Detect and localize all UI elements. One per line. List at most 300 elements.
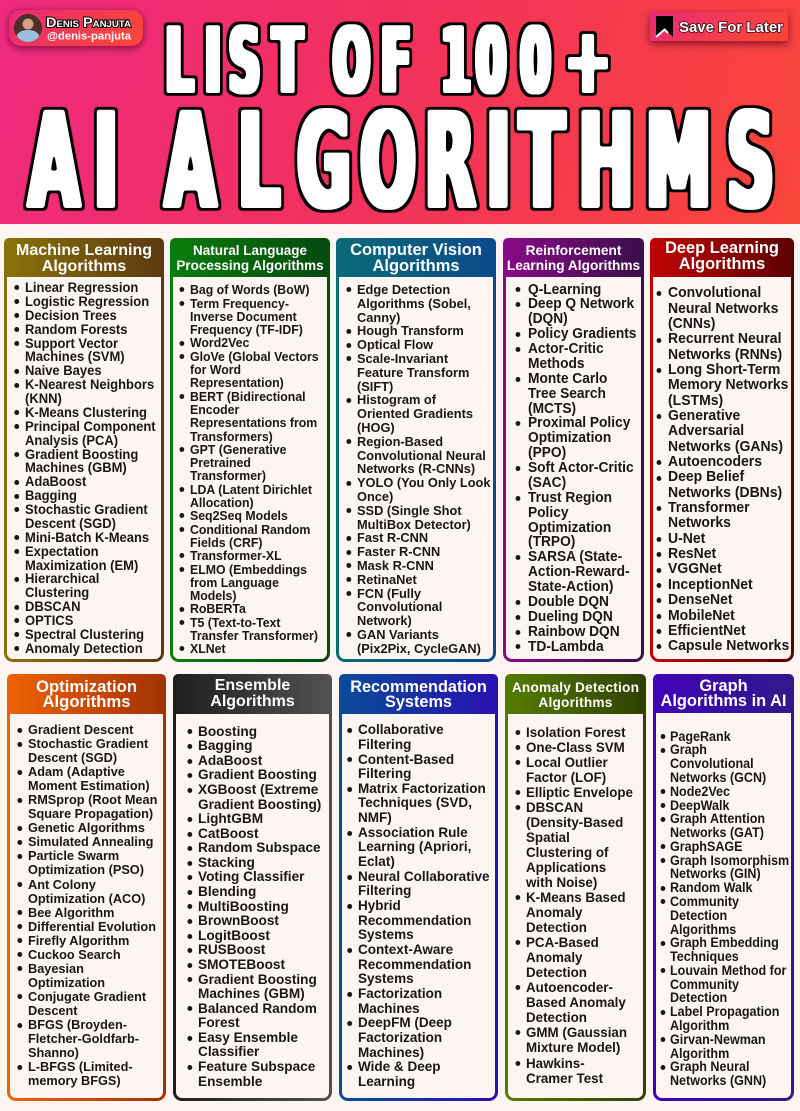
list: ensemble: Bagging: [198, 738, 252, 754]
list: reinforcement learning: Policy: [528, 505, 568, 521]
panel: optimization: [7, 674, 166, 1101]
list: machine learning: Mini-Batch K-Means: [25, 530, 149, 545]
list: machine learning: OPTICS: [25, 613, 73, 628]
list: reinforcement learning: Actor-Critic: [528, 341, 604, 357]
list: anomaly detection: One-Class SVM: [526, 739, 625, 755]
author name: Denis Panjuta: [46, 15, 132, 30]
heading: reinforcement learning: Learning Algorithms: [507, 258, 640, 273]
title line: list of 100+: LIST OF 100: [166, 8, 551, 114]
list: deep learning: Networks (DBNs): [668, 485, 782, 501]
list: machine learning: Gradient Boosting: [25, 446, 138, 462]
list: computer vision: Network): [357, 613, 412, 628]
header banner: [0, 0, 800, 224]
list: optimization: Bee Algorithm: [28, 905, 115, 920]
list: recommendation systems: Filtering: [358, 883, 411, 898]
list: natural language processing: Transformers): [190, 429, 273, 444]
list: deep learning: Long Short-Term: [668, 362, 780, 378]
list: optimization: Adam (Adaptive: [28, 764, 125, 779]
list: reinforcement learning: Trust Region: [528, 490, 612, 506]
title line: list of 100+: +: [565, 8, 611, 114]
list: deep learning: ResNet: [668, 546, 716, 562]
list: ensemble: SMOTEBoost: [198, 957, 285, 973]
list: deep learning: InceptionNet: [668, 577, 753, 593]
list: ensemble: [187, 724, 321, 1090]
list: deep learning: Networks (GANs): [668, 439, 783, 455]
list: anomaly detection: Factor (LOF): [526, 769, 606, 785]
list: computer vision: Convolutional Neural: [357, 448, 486, 463]
list: optimization: Particle Swarm: [28, 848, 119, 863]
list: deep learning: Capsule Networks: [668, 638, 789, 654]
list: recommendation systems: Recommendation: [358, 957, 471, 972]
list: machine learning: Hierarchical: [25, 571, 99, 586]
list: anomaly detection: Local Outlier: [526, 754, 608, 770]
list: ensemble: Balanced Random: [198, 1001, 317, 1017]
list: recommendation systems: DeepFM (Deep: [358, 1015, 452, 1030]
list: ensemble: Forest: [198, 1015, 240, 1031]
list: graph algorithms: Community: [670, 977, 739, 992]
list: recommendation systems: Matrix Factorization: [358, 781, 486, 796]
list: reinforcement learning: (PPO): [528, 445, 566, 461]
list: reinforcement learning: SARSA (State-: [528, 549, 622, 565]
list: optimization: RMSprop (Root Mean: [28, 792, 157, 807]
list: reinforcement learning: (MCTS): [528, 400, 576, 416]
heading: anomaly detection: [512, 680, 639, 710]
list: ensemble: Gradient Boosting: [198, 972, 317, 988]
list: natural language processing: XLNet: [190, 641, 226, 656]
list: reinforcement learning: Methods: [528, 356, 585, 372]
list: natural language processing: Seq2Seq Models: [190, 508, 288, 523]
list: natural language processing: Conditional Random: [190, 522, 310, 537]
heading: computer vision: Algorithms: [372, 257, 460, 275]
list: natural language processing: RoBERTa: [190, 601, 246, 616]
heading: computer vision: Computer Vision: [350, 241, 482, 259]
list: recommendation systems: Content-Based: [358, 752, 454, 766]
list: recommendation systems: Systems: [358, 927, 414, 942]
list: reinforcement learning: Rainbow DQN: [528, 624, 620, 640]
list: optimization: Descent: [28, 1003, 78, 1018]
list: reinforcement learning: (DQN): [528, 311, 568, 327]
list: deep learning: (LSTMs): [668, 393, 723, 409]
list: machine learning: Descent (SGD): [25, 516, 116, 531]
list: graph algorithms: Graph: [670, 742, 707, 757]
list: machine learning: K-Nearest Neighbors: [25, 377, 154, 392]
list: recommendation systems: Association Rule: [358, 825, 468, 840]
list: deep learning: Networks: [668, 515, 731, 531]
list: natural language processing: Transformer): [190, 468, 266, 483]
list: computer vision: Edge Detection: [357, 282, 450, 297]
list: optimization: Ant Colony: [28, 877, 96, 892]
list: reinforcement learning: Q-Learning: [528, 282, 601, 298]
list: reinforcement learning: Deep Q Network: [528, 296, 634, 312]
list: recommendation systems: Filtering: [358, 766, 411, 781]
heading: reinforcement learning: [507, 242, 640, 273]
list: recommendation systems: Hybrid: [358, 898, 401, 913]
list: graph algorithms: Networks (GIN): [670, 866, 761, 881]
list: ensemble: Gradient Boosting: [198, 767, 317, 783]
list: optimization: Gradient Descent: [28, 722, 133, 737]
list: optimization: Optimization: [28, 975, 105, 990]
heading: graph algorithms: Graph: [699, 677, 748, 695]
list: computer vision: FCN (Fully: [357, 586, 421, 601]
list: machine learning: Bagging: [25, 488, 77, 503]
list: computer vision: Oriented Gradients: [357, 406, 473, 421]
list: deep learning: Networks (RNNs): [668, 347, 782, 363]
heading: machine learning: Machine Learning: [16, 242, 152, 259]
heading: graph algorithms: Algorithms in AI: [661, 692, 786, 710]
list: natural language processing: Frequency (TF-IDF): [190, 322, 303, 337]
list: recommendation systems: Context-Aware: [358, 942, 453, 957]
list: graph algorithms: Graph Isomorphism: [670, 853, 789, 868]
list: natural language processing: Bag of Words (BoW): [190, 282, 309, 297]
heading: machine learning: Algorithms: [42, 258, 126, 275]
list: deep learning: Memory Networks: [668, 377, 788, 393]
list: recommendation systems: Learning: [358, 1074, 415, 1089]
list: computer vision: SSD (Single Shot: [357, 503, 462, 518]
list: graph algorithms: [660, 729, 789, 1088]
heading: reinforcement learning: Reinforcement: [526, 242, 621, 258]
panel: deep learning: [650, 238, 794, 662]
list: ensemble: BrownBoost: [198, 913, 279, 929]
list: natural language processing: GPT (Generative: [190, 442, 286, 457]
list: optimization: Moment Estimation): [28, 778, 150, 793]
list: ensemble: MultiBoosting: [198, 899, 289, 915]
list: computer vision: [346, 282, 491, 656]
list: anomaly detection: [516, 724, 633, 1086]
list: optimization: Optimization (PSO): [28, 862, 144, 877]
list: reinforcement learning: Soft Actor-Critic: [528, 460, 634, 476]
list: optimization: Cuckoo Search: [28, 947, 121, 962]
list: machine learning: (KNN): [25, 391, 62, 406]
list: ensemble: Blending: [198, 884, 256, 900]
heading: deep learning: Deep Learning: [665, 239, 779, 257]
list: recommendation systems: Machines): [358, 1045, 424, 1060]
list: deep learning: DenseNet: [668, 592, 733, 608]
icon: bookmark: [656, 16, 673, 37]
list: graph algorithms: Techniques: [670, 949, 739, 964]
list: optimization: Square Propagation): [28, 806, 153, 821]
heading: ensemble: Algorithms: [210, 693, 295, 710]
list: natural language processing: Representation): [190, 375, 284, 390]
list: reinforcement learning: Action-Reward-: [528, 564, 630, 580]
list: machine learning: Maximization (EM): [25, 558, 138, 572]
list: machine learning: Stochastic Gradient: [25, 502, 148, 517]
list: deep learning: Neural Networks: [668, 301, 778, 317]
list: natural language processing: LDA (Latent Dirichlet: [190, 482, 312, 497]
list: anomaly detection: Detection: [526, 1009, 587, 1025]
list: natural language processing: Allocation): [190, 495, 254, 510]
icon: profile avatar: [14, 14, 42, 42]
list: natural language processing: GloVe (Global Vectors: [190, 349, 319, 364]
heading: optimization: [36, 677, 137, 711]
list: optimization: Genetic Algorithms: [28, 820, 145, 835]
list: ensemble: Gradient Boosting): [198, 797, 321, 813]
list: computer vision: Region-Based: [357, 434, 443, 449]
list: anomaly detection: Isolation Forest: [526, 724, 626, 740]
list: deep learning: Deep Belief: [668, 469, 744, 485]
save for later badge: [650, 12, 788, 41]
banner artwork: [3, 6, 794, 224]
list: deep learning: Adversarial: [668, 423, 744, 439]
list: optimization: Optimization (ACO): [28, 891, 145, 906]
list: machine learning: K-Means Clustering: [25, 405, 147, 420]
list: anomaly detection: Detection: [526, 964, 587, 980]
list: natural language processing: T5 (Text-to-Text: [190, 615, 281, 630]
list: machine learning: Linear Regression: [25, 280, 138, 295]
heading: recommendation systems: Recommendation: [350, 678, 487, 696]
list: computer vision: MultiBox Detector): [357, 517, 471, 532]
list: machine learning: Machines (SVM): [25, 349, 125, 364]
list: computer vision: Scale-Invariant: [357, 351, 448, 366]
heading: recommendation systems: [350, 678, 487, 711]
list: computer vision: Canny): [357, 310, 400, 325]
list: deep learning: [656, 285, 789, 654]
list: reinforcement learning: (SAC): [528, 475, 566, 491]
list: recommendation systems: Learning (Apriori,: [358, 839, 471, 854]
list: computer vision: Convolutional: [357, 599, 442, 614]
list: computer vision: RetinaNet: [357, 572, 417, 587]
list: ensemble: LogitBoost: [198, 928, 270, 944]
list: ensemble: AdaBoost: [198, 753, 262, 769]
list: reinforcement learning: Monte Carlo: [528, 371, 607, 387]
list: ensemble: Machines (GBM): [198, 986, 305, 1002]
panel: reinforcement learning: [503, 238, 644, 662]
list: computer vision: (Pix2Pix, CycleGAN): [357, 641, 481, 656]
list: computer vision: Networks (R-CNNs): [357, 461, 475, 476]
list: ensemble: Classifier: [198, 1044, 259, 1060]
list: ensemble: XGBoost (Extreme: [198, 782, 318, 798]
list: anomaly detection: Anomaly: [526, 904, 582, 920]
list: machine learning: Logistic Regression: [25, 294, 149, 309]
list: natural language processing: Models): [190, 588, 237, 603]
list: recommendation systems: Collaborative: [358, 722, 444, 737]
heading: ensemble: [210, 677, 295, 710]
list: machine learning: Random Forests: [25, 322, 127, 337]
list: deep learning: Convolutional: [668, 285, 761, 301]
list: computer vision: YOLO (You Only Look: [357, 475, 491, 490]
list: natural language processing: Term Frequency-: [190, 296, 289, 311]
list: natural language processing: Transfer Transformer): [190, 628, 318, 643]
list: ensemble: Voting Classifier: [198, 869, 304, 885]
list: graph algorithms: Random Walk: [670, 880, 752, 895]
list: machine learning: AdaBoost: [25, 474, 86, 489]
list: ensemble: Easy Ensemble: [198, 1030, 298, 1046]
list: anomaly detection: DBSCAN: [526, 799, 583, 815]
list: machine learning: Anomaly Detection: [25, 641, 143, 656]
list: reinforcement learning: (TRPO): [528, 534, 575, 550]
list: graph algorithms: Algorithms: [670, 922, 736, 937]
list: anomaly detection: with Noise): [526, 874, 597, 890]
list: optimization: Conjugate Gradient: [28, 989, 146, 1004]
list: recommendation systems: Factorization: [358, 1030, 442, 1045]
panel: recommendation systems: [339, 674, 498, 1101]
list: anomaly detection: Based Anomaly: [526, 994, 626, 1010]
heading: anomaly detection: Anomaly Detection: [512, 680, 639, 695]
list: reinforcement learning: Double DQN: [528, 594, 609, 610]
list: deep learning: (CNNs): [668, 316, 715, 332]
list: graph algorithms: Graph Embedding: [670, 935, 779, 950]
list: anomaly detection: Detection: [526, 919, 587, 935]
list: optimization: [17, 722, 157, 1088]
list: reinforcement learning: Optimization: [528, 430, 611, 446]
list: deep learning: EfficientNet: [668, 623, 746, 639]
list: anomaly detection: Spatial: [526, 829, 570, 845]
list: recommendation systems: Techniques (SVD,: [358, 795, 472, 810]
list: optimization: Shanno): [28, 1045, 79, 1060]
list: natural language processing: ELMO (Embeddings: [190, 562, 307, 577]
list: natural language processing: Pretrained: [190, 455, 251, 470]
list: computer vision: Optical Flow: [357, 337, 433, 352]
list: machine learning: Naive Bayes: [25, 363, 102, 378]
list: deep learning: U-Net: [668, 531, 705, 547]
list: graph algorithms: Graph Attention: [670, 811, 765, 826]
list: graph algorithms: Node2Vec: [670, 784, 730, 799]
list: graph algorithms: Community: [670, 894, 739, 909]
list: recommendation systems: Neural Collaborative: [358, 869, 490, 884]
list: anomaly detection: (Density-Based: [526, 814, 623, 830]
heading: natural language processing: Natural Language: [193, 242, 307, 258]
list: anomaly detection: Mixture Model): [526, 1039, 620, 1055]
heading: deep learning: [665, 239, 779, 273]
list: computer vision: Once): [357, 489, 393, 504]
list: anomaly detection: PCA-Based: [526, 934, 599, 950]
list: graph algorithms: Girvan-Newman: [670, 1032, 766, 1047]
list: ensemble: LightGBM: [198, 811, 263, 827]
heading: ensemble: Ensemble: [215, 677, 290, 694]
list: anomaly detection: Elliptic Envelope: [526, 784, 633, 800]
list: reinforcement learning: Dueling DQN: [528, 609, 613, 625]
panel: anomaly detection: [505, 674, 646, 1101]
list: optimization: Descent (SGD): [28, 750, 117, 765]
heading: optimization: Optimization: [36, 677, 137, 696]
list: deep learning: MobileNet: [668, 608, 735, 624]
list: computer vision: Mask R-CNN: [357, 558, 434, 573]
list: computer vision: Fast R-CNN: [357, 530, 428, 545]
list: recommendation systems: [347, 722, 490, 1089]
list: recommendation systems: NMF): [358, 810, 392, 825]
list: computer vision: Faster R-CNN: [357, 544, 440, 559]
list: natural language processing: Inverse Document: [190, 309, 297, 324]
list: deep learning: Generative: [668, 408, 740, 424]
panel: graph algorithms: [653, 674, 794, 1101]
save label: Save For Later: [679, 19, 783, 36]
list: graph algorithms: DeepWalk: [670, 798, 730, 812]
panel: ensemble: [173, 674, 332, 1101]
list: graph algorithms: Detection: [670, 908, 727, 923]
list: computer vision: Histogram of: [357, 392, 436, 407]
list: anomaly detection: Autoencoder-: [526, 979, 613, 995]
list: machine learning: Principal Component: [25, 419, 156, 434]
list: machine learning: Clustering: [25, 585, 89, 600]
list: ensemble: RUSBoost: [198, 942, 265, 958]
list: computer vision: Hough Transform: [357, 323, 464, 338]
list: deep learning: VGGNet: [668, 561, 722, 577]
list: machine learning: DBSCAN: [25, 599, 81, 614]
list: graph algorithms: Algorithm: [670, 1018, 729, 1033]
list: computer vision: Algorithms (Sobel,: [357, 296, 471, 311]
list: anomaly detection: Applications: [526, 859, 606, 875]
list: ensemble: Random Subspace: [198, 840, 321, 856]
list: anomaly detection: Anomaly: [526, 949, 582, 965]
list: reinforcement learning: Policy Gradients: [528, 326, 636, 342]
list: machine learning: Analysis (PCA): [25, 433, 118, 448]
list: reinforcement learning: Proximal Policy: [528, 415, 630, 431]
list: natural language processing: Word2Vec: [190, 335, 249, 350]
list: recommendation systems: Systems: [358, 971, 414, 986]
list: anomaly detection: Cramer Test: [526, 1070, 603, 1086]
list: recommendation systems: Eclat): [358, 854, 395, 869]
list: recommendation systems: Machines: [358, 1001, 420, 1016]
list: graph algorithms: Convolutional: [670, 756, 754, 771]
list: optimization: BFGS (Broyden-: [28, 1017, 127, 1032]
list: machine learning: Spectral Clustering: [25, 627, 144, 642]
list: graph algorithms: Label Propagation: [670, 1004, 779, 1019]
list: anomaly detection: Hawkins-: [526, 1055, 585, 1071]
list: graph algorithms: Networks (GNN): [670, 1073, 766, 1088]
list: anomaly detection: GMM (Gaussian: [526, 1024, 627, 1040]
list: natural language processing: [180, 282, 319, 656]
list: computer vision: (SIFT): [357, 379, 393, 394]
list: graph algorithms: Algorithm: [670, 1046, 729, 1061]
profile badge: [9, 10, 143, 46]
list: reinforcement learning: TD-Lambda: [528, 638, 604, 654]
list: reinforcement learning: Tree Search: [528, 386, 606, 402]
heading: optimization: Algorithms: [42, 692, 131, 711]
list: optimization: L-BFGS (Limited-: [28, 1059, 133, 1074]
list: natural language processing: from Language: [190, 575, 279, 590]
heading: deep learning: Algorithms: [679, 255, 765, 273]
list: computer vision: GAN Variants: [357, 627, 439, 642]
list: reinforcement learning: Optimization: [528, 520, 611, 536]
list: graph algorithms: Networks (GAT): [670, 825, 764, 840]
list: ensemble: Ensemble: [198, 1074, 262, 1090]
list: natural language processing: Encoder: [190, 402, 239, 417]
panel: natural language processing: [170, 238, 330, 662]
heading: machine learning: [16, 242, 152, 275]
list: graph algorithms: Detection: [670, 990, 727, 1005]
list: optimization: Bayesian: [28, 961, 84, 976]
list: anomaly detection: K-Means Based: [526, 889, 626, 905]
list: optimization: Differential Evolution: [28, 919, 156, 934]
list: computer vision: Feature Transform: [357, 365, 469, 380]
list: recommendation systems: Recommendation: [358, 913, 471, 928]
list: natural language processing: for Word: [190, 362, 241, 377]
list: optimization: Simulated Annealing: [28, 834, 153, 849]
list: recommendation systems: Wide & Deep: [358, 1059, 441, 1074]
list: computer vision: (HOG): [357, 420, 395, 435]
list: reinforcement learning: [516, 282, 636, 654]
heading: natural language processing: [176, 242, 324, 273]
list: natural language processing: BERT (Bidirectional: [190, 389, 306, 404]
list: optimization: Fletcher-Goldfarb-: [28, 1031, 139, 1046]
list: ensemble: CatBoost: [198, 826, 259, 842]
heading: natural language processing: Processing Algorithms: [176, 258, 324, 273]
heading: recommendation systems: Systems: [385, 693, 452, 711]
panel: machine learning: [4, 238, 164, 662]
list: anomaly detection: Clustering of: [526, 844, 608, 860]
list: natural language processing: Representations from: [190, 415, 317, 430]
list: optimization: memory BFGS): [28, 1073, 121, 1088]
list: deep learning: Autoencoders: [668, 454, 762, 470]
list: graph algorithms: Networks (GCN): [670, 770, 766, 785]
list: graph algorithms: GraphSAGE: [670, 839, 743, 854]
list: machine learning: Support Vector: [25, 336, 118, 350]
author handle: @denis-panjuta: [47, 30, 132, 42]
panel: computer vision: [336, 238, 496, 662]
list: machine learning: Machines (GBM): [25, 460, 127, 475]
list: deep learning: Recurrent Neural: [668, 331, 781, 347]
list: optimization: Stochastic Gradient: [28, 736, 148, 751]
list: reinforcement learning: State-Action): [528, 579, 614, 595]
